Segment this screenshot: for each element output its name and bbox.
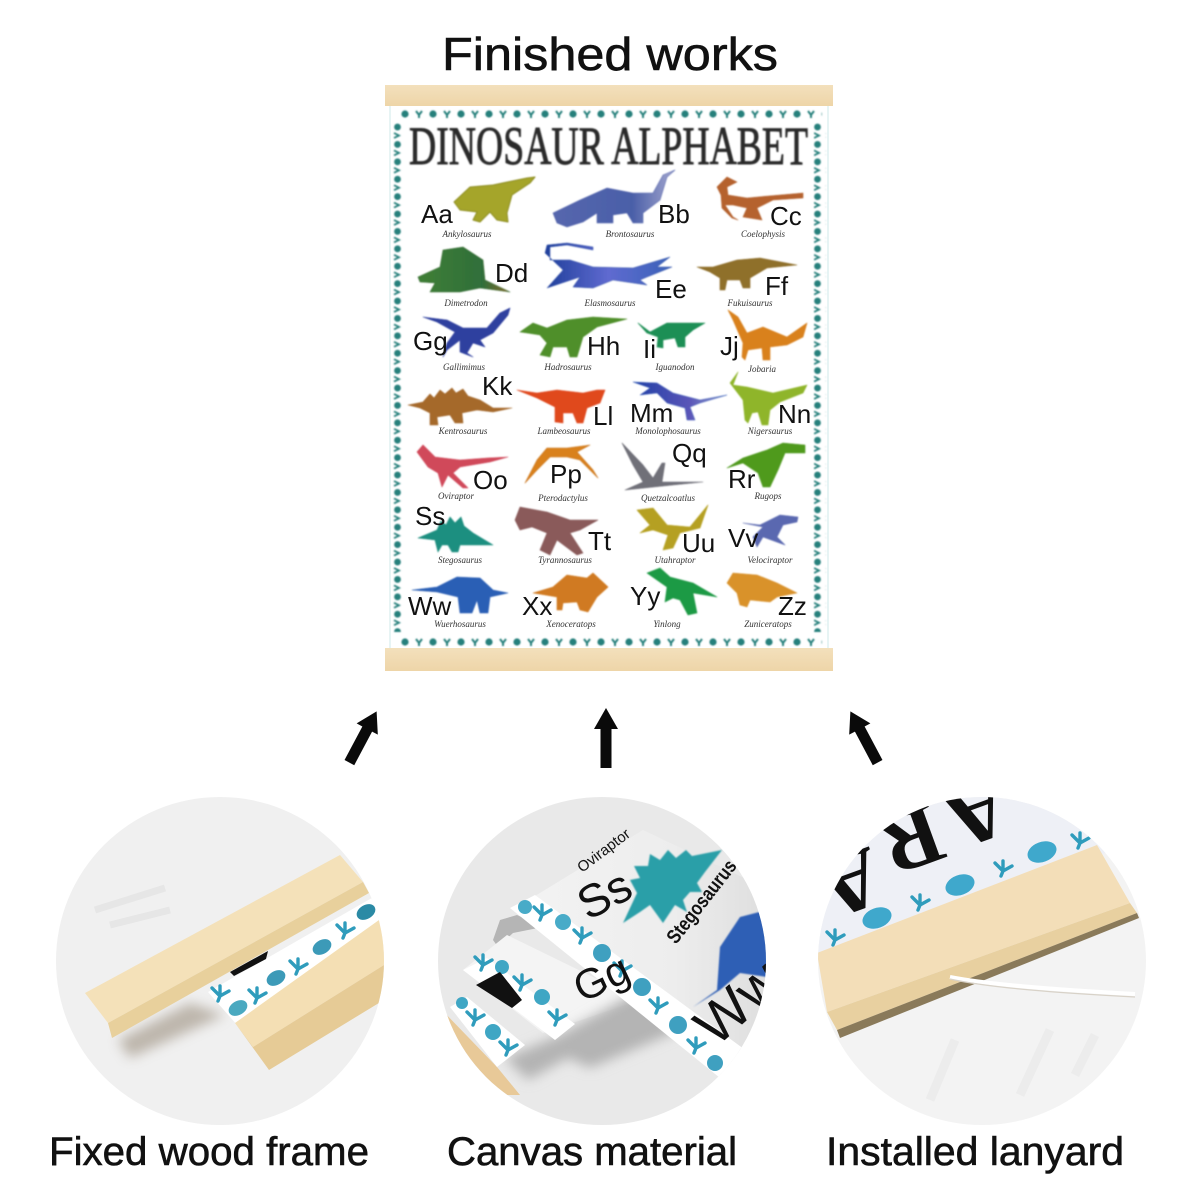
dinosaur: Rr xyxy=(727,443,805,501)
caption: fixed wood frame: Fixed wood frame xyxy=(49,1130,369,1174)
dinosaur: Aa: Aa xyxy=(421,199,453,229)
rail shadow line xyxy=(837,913,1139,1038)
canvas printed text: Stegosaurus xyxy=(663,856,742,948)
top rail face xyxy=(85,855,363,1023)
dinosaur: Bb: Brontosaurus xyxy=(606,229,655,239)
rail top face xyxy=(817,845,1130,1012)
dinosaur: Jj: Jj xyxy=(720,331,739,361)
dinosaur: Xx: Xenoceratops xyxy=(545,619,596,629)
dinosaur: Ll: Ll xyxy=(593,401,613,431)
dinosaur: Zz: Zz xyxy=(778,591,807,621)
dinosaur: Vv: Vv xyxy=(728,523,758,553)
bottom wooden rail xyxy=(385,648,833,671)
dinosaur: Mm xyxy=(630,382,727,436)
dinosaur: Nn xyxy=(730,372,811,436)
dinosaur: Hh: Hadrosaurus xyxy=(543,362,592,372)
dinosaur: Tt: Tt xyxy=(588,526,612,556)
dinosaur: Ss: Ss xyxy=(415,501,445,531)
dinosaur: Tt xyxy=(515,507,612,565)
canvas printed text: Ww xyxy=(682,947,794,1057)
dinosaur: Aa xyxy=(421,177,535,239)
canvas printed text: Ss xyxy=(568,859,640,930)
dinosaur: Kk: Kentrosaurus xyxy=(438,426,488,436)
strip footprints xyxy=(212,901,378,1019)
panel: fixed wood frame photo xyxy=(50,790,392,1130)
panel: installed lanyard photo xyxy=(818,797,1146,1125)
blue dinosaur xyxy=(693,910,767,1007)
dinosaur: Rr: Rugops xyxy=(754,491,782,501)
faint ghost print xyxy=(930,1030,1095,1100)
dark inner roll xyxy=(493,915,535,944)
dinosaur: Ff: Ff xyxy=(765,271,789,301)
dinosaur: Pp: Pp xyxy=(550,459,582,489)
arrow: left xyxy=(339,706,387,768)
dinosaur: Kk xyxy=(408,371,513,436)
dinosaur: Yy xyxy=(630,568,717,629)
teal stegosaurus xyxy=(623,850,722,923)
dinosaur: Yy: Yinlong xyxy=(653,619,681,629)
upside-down heading letters xyxy=(834,797,994,912)
caption: canvas material: Canvas material xyxy=(447,1130,737,1174)
dinosaur: Pp: Pterodactylus xyxy=(537,493,588,503)
dinosaur: Tt: Tyrannosaurus xyxy=(538,555,592,565)
canvas strip xyxy=(208,898,378,1022)
dinosaur: Uu: Utahraptor xyxy=(654,555,696,565)
dinosaur: Nn: Nigersaurus xyxy=(747,426,793,436)
backdrop sheet xyxy=(536,877,766,1047)
dinosaur: Gg: Gg xyxy=(413,326,448,356)
dinosaur: Cc xyxy=(717,177,803,239)
arrow: right xyxy=(840,706,888,768)
footprint row xyxy=(827,833,1089,945)
dinosaur: Vv xyxy=(728,515,798,565)
dinosaur: Zz: Zuniceratops xyxy=(744,619,792,629)
upside-down heading letters: R xyxy=(864,785,956,897)
dinosaur: Vv: Velociraptor xyxy=(748,555,793,565)
canvas printed text xyxy=(576,830,766,1040)
dinosaur: Zz xyxy=(727,573,807,629)
dinosaur: Qq: Quetzalcoatlus xyxy=(641,493,695,503)
dinosaur: Cc: Coelophysis xyxy=(741,229,785,239)
dinosaur: Dd: Dd xyxy=(495,258,528,288)
dinosaur: Ff xyxy=(697,258,797,308)
dinosaur: Qq: Qq xyxy=(672,438,707,468)
dinosaur: Ii xyxy=(638,323,705,372)
dinosaur: Ww: Ww xyxy=(408,591,452,621)
upside-down heading letters: A xyxy=(805,828,896,940)
top wooden rail xyxy=(385,85,833,106)
dinosaur: Oo: Oo xyxy=(473,465,508,495)
second band xyxy=(463,955,575,1040)
roll paper xyxy=(465,935,620,1033)
dinosaur: Ll xyxy=(517,390,613,436)
lower rail front xyxy=(237,965,384,1070)
poster footprint border xyxy=(392,108,826,646)
dinosaur: Ff: Fukuisaurus xyxy=(726,298,773,308)
dinosaur: Gg xyxy=(413,308,510,372)
dinosaur: Hh xyxy=(520,317,627,372)
dinosaur: Dd xyxy=(418,247,528,308)
dinosaur: Ii: Ii xyxy=(643,334,656,364)
dinosaur: Dd: Dimetrodon xyxy=(443,298,488,308)
faint ghost print xyxy=(95,888,170,925)
dinosaur: Gg: Gallimimus xyxy=(443,362,485,372)
fold shadow xyxy=(505,990,680,1080)
arrow: middle xyxy=(594,708,618,768)
dinosaur: Uu: Uu xyxy=(682,528,715,558)
dinosaur: Oo xyxy=(417,445,508,501)
wooden end xyxy=(447,1016,520,1095)
upside-down heading letters: A xyxy=(932,758,1023,870)
dinosaur: Hh: Hh xyxy=(587,331,620,361)
lanyard cord xyxy=(950,977,1135,994)
dinosaur: Xx: Xx xyxy=(522,591,552,621)
rail front face xyxy=(827,903,1137,1030)
dinosaur: Yy: Yy xyxy=(630,581,660,611)
dinosaur: Ee: Elasmosaurus xyxy=(583,298,636,308)
dinosaur: Cc: Cc xyxy=(770,201,802,231)
dinosaur: Ss xyxy=(415,501,493,565)
poster canvas xyxy=(390,104,828,650)
dinosaur: Rr: Rr xyxy=(728,464,756,494)
caption: installed lanyard: Installed lanyard xyxy=(826,1130,1124,1174)
canvas printed text: Oviraptor xyxy=(574,825,634,876)
dinosaur: Ee xyxy=(545,243,687,308)
dinosaur: Xx xyxy=(522,573,608,629)
lower rail face xyxy=(235,920,392,1047)
fold band xyxy=(510,895,748,1078)
dinosaur: Bb xyxy=(553,170,690,239)
panel: hanging poster xyxy=(385,85,833,671)
dinosaur: Pp xyxy=(525,445,598,503)
dinosaur: Ee: Ee xyxy=(655,274,687,304)
dinosaur: Ww xyxy=(408,577,508,629)
dinosaur: Jj xyxy=(720,310,807,374)
dinosaur: Jj: Jobaria xyxy=(748,364,776,374)
dinosaur: Bb: Bb xyxy=(658,199,690,229)
dinosaur: Uu xyxy=(637,505,715,565)
dinosaur: Kk: Kk xyxy=(482,371,513,401)
roll letter block xyxy=(476,972,522,1008)
canvas printed text: Gg xyxy=(566,945,637,1011)
title: Finished works: Finished works xyxy=(442,28,778,80)
dinosaur: Mm: Mm xyxy=(630,398,673,428)
shadow under rail xyxy=(118,1003,225,1058)
third band xyxy=(450,997,525,1067)
poster heading: DINOSAUR ALPHABET xyxy=(409,116,808,176)
poster edge xyxy=(810,790,1155,960)
dinosaur: Oo: Oviraptor xyxy=(438,491,474,501)
black letter fragment xyxy=(230,951,268,976)
dinosaur: Ww: Wuerhosaurus xyxy=(434,619,486,629)
dinosaur: Ss: Stegosaurus xyxy=(438,555,482,565)
dinosaur: Qq xyxy=(622,438,707,503)
dinosaur: Nn: Nn xyxy=(778,399,811,429)
dinosaur: Aa: Ankylosaurus xyxy=(442,229,492,239)
panel: canvas material photo xyxy=(438,797,766,1125)
dinosaur: Mm: Monolophosaurus xyxy=(634,426,701,436)
top rail front xyxy=(108,882,369,1038)
dinosaur: Ll: Lambeosaurus xyxy=(536,426,591,436)
dinosaur: Ii: Iguanodon xyxy=(654,362,695,372)
